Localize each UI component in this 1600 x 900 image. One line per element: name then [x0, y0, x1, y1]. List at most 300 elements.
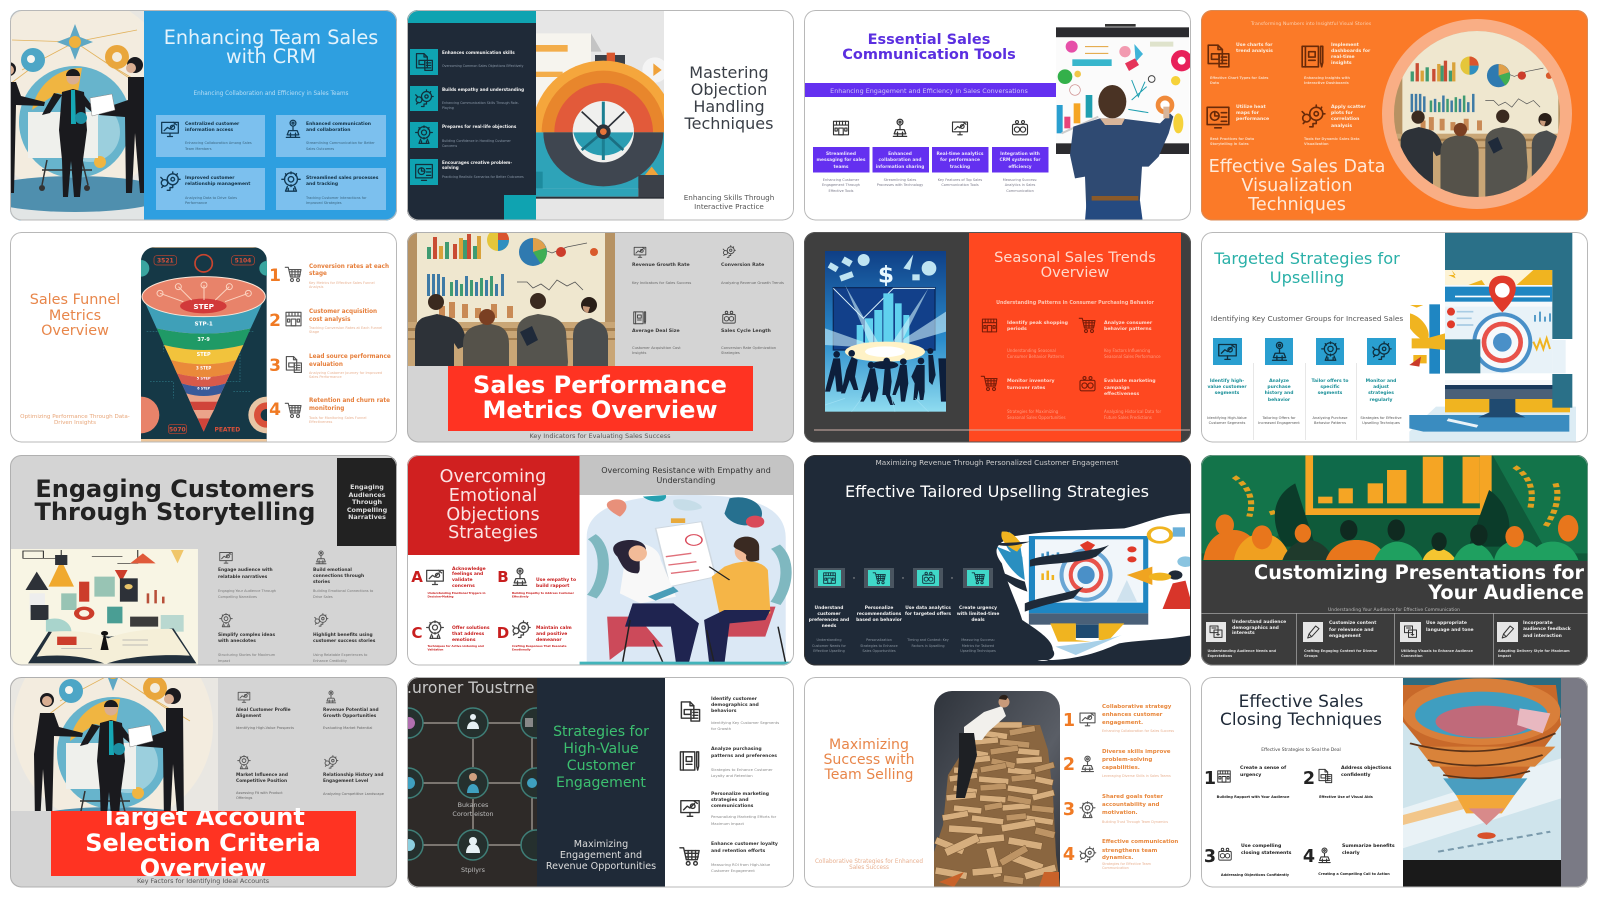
- four strategies: specific: [1320, 384, 1340, 390]
- four columns: Adapting Delivery Style for Maximum: [1498, 649, 1570, 653]
- four points: Diverse skills improve: [1102, 749, 1171, 755]
- four techniques: 3: [1204, 847, 1216, 867]
- four actions: periods: [1007, 326, 1027, 332]
- subtitle: Optimizing Performance Through Data-: [20, 414, 130, 420]
- left dark column: Builds empathy and understanding: [442, 87, 524, 92]
- four metrics: Analysis: [309, 285, 324, 289]
- four strategies: [809, 568, 999, 653]
- left dark column: Encourages creative problem-: [442, 160, 512, 165]
- image: two people in conversation: [577, 495, 801, 668]
- four columns: Crafting Engaging Content for Diverse: [1304, 649, 1378, 653]
- feature cards: Analyzing Data to Drive Sales: [185, 196, 237, 200]
- four actions: [680, 696, 779, 873]
- four actions: Analyzing Historical Data for: [1104, 409, 1161, 414]
- four techniques: Summarize benefits: [1342, 843, 1395, 849]
- four metrics: 2: [269, 311, 281, 331]
- four techniques: Visualization: [1304, 142, 1329, 146]
- four points: Build emotional: [313, 567, 352, 573]
- left dark column: Enhances communication skills: [442, 50, 515, 55]
- image: customer network diagram: Corortleiston: [452, 810, 494, 818]
- panel: Effective Sales Data Visualization Techniques: [1201, 10, 1588, 221]
- subtitle: Driven Insights: [54, 420, 96, 426]
- four strategies: for targeted offers: [905, 611, 951, 617]
- four metrics: [632, 246, 784, 355]
- subtitle: Maximizing: [574, 839, 628, 850]
- title: Effective Sales: [1239, 692, 1364, 712]
- title: Customer: [567, 758, 635, 774]
- four points: enhances customer: [1102, 712, 1163, 718]
- four tactics: Validation: [428, 648, 443, 652]
- four strategies: strategies: [1368, 390, 1394, 396]
- four metrics: Analyzing Customer Journey for Improved: [309, 371, 382, 375]
- four points: stories: [313, 579, 330, 585]
- four columns: engagement: [1329, 633, 1362, 639]
- image: open storybook: [10, 549, 198, 666]
- four tactics: build rapport: [536, 583, 570, 589]
- four tools: tracking: [950, 164, 970, 170]
- four techniques: 2: [1303, 769, 1315, 789]
- four tactics: C: [411, 624, 423, 642]
- four points: Building Emotional Connections to: [313, 589, 373, 593]
- feature cards: Centralized customer: [185, 121, 240, 127]
- four strategies: Identifying High-Value: [1207, 416, 1248, 420]
- four actions: strategies and: [711, 797, 749, 803]
- four points: Compelling Narratives: [218, 595, 257, 599]
- four strategies: Increased Engagement: [1258, 421, 1300, 425]
- four tools: Processes with Technology: [877, 183, 923, 187]
- title: Your Audience: [1427, 581, 1584, 604]
- title: Sales Funnel: [30, 292, 120, 308]
- four tools: Real-time analytics: [936, 151, 984, 157]
- four metrics: Insights: [632, 351, 646, 355]
- subtitle: Maximizing Revenue Through Personalized Customer Engagement: [876, 458, 1119, 467]
- image: customer network diagram: Bukances: [458, 801, 489, 809]
- four metrics: Conversion rates at each: [309, 264, 389, 270]
- four metrics: stage: [309, 271, 327, 277]
- four actions: Strategies to Enhance Customer: [711, 767, 773, 772]
- four tools: Streamlining Sales: [884, 178, 917, 182]
- four techniques: Data: [1210, 81, 1220, 85]
- image: funnel: STP-1: [195, 322, 213, 328]
- four points: [1063, 704, 1178, 870]
- title: Overview: [1041, 264, 1109, 281]
- four strategies: Personalization: [866, 638, 892, 642]
- four points: Engage audience with: [218, 567, 273, 573]
- image: funnel: 5 STEP: [197, 376, 211, 380]
- four techniques: Use charts for: [1236, 42, 1273, 48]
- four metrics: Key Indicators for Sales Success: [632, 281, 691, 285]
- title: Strategies for: [553, 724, 649, 740]
- feature cards: Team Members: [184, 147, 212, 151]
- four techniques: Effective Use of Visual Aids: [1319, 795, 1373, 799]
- four actions: Personalizing Marketing Efforts for: [711, 814, 777, 819]
- four metrics: monitoring: [309, 406, 344, 412]
- image: sales surge celebration: [825, 251, 946, 412]
- title: Targeted Strategies for: [1213, 249, 1400, 268]
- title banner: Selection Criteria: [85, 829, 321, 857]
- subtitle: Key Factors for Identifying Ideal Accounts: [137, 877, 270, 885]
- panel: Sales Performance Metrics Overview: [407, 232, 794, 442]
- four columns: Groups: [1304, 654, 1318, 658]
- four metrics: Sales Cycle Length: [721, 328, 771, 334]
- four tactics: Emotionally: [512, 648, 531, 652]
- image: team presenting CRM globe: [10, 626, 220, 851]
- panel: Seasonal Sales Trends Overview: [804, 232, 1191, 443]
- four metrics: Conversion Rate Optimization: [721, 346, 777, 350]
- image: funnel: 3 STEP: [196, 365, 211, 370]
- four techniques: clearly: [1342, 850, 1360, 856]
- four actions: Personalize marketing: [711, 791, 769, 797]
- four metrics: [269, 264, 391, 424]
- four points: Building Trust Through Team Dynamics: [1102, 820, 1168, 824]
- feature cards: Streamlining Communication for Better: [306, 141, 375, 145]
- four strategies: regularly: [1370, 397, 1393, 403]
- four strategies: Tailor offers to: [1312, 378, 1348, 384]
- side tag: Narratives: [348, 513, 386, 521]
- title: Through Storytelling: [35, 498, 315, 526]
- four actions: Maximum Impact: [711, 821, 745, 826]
- four tactics: feelings and: [452, 571, 483, 577]
- title: Enhancing Team Sales: [164, 26, 378, 49]
- title block: Overcoming: [440, 467, 546, 487]
- four actions: Seasonal Sales Opportunities: [1007, 415, 1066, 420]
- image: funnel: 6 STEP: [197, 387, 211, 391]
- title: Overview: [41, 323, 109, 339]
- four columns: demographics and: [1232, 625, 1279, 631]
- subtitle: Key Indicators for Evaluating Sales Success: [529, 432, 671, 440]
- four tools: Enhanced: [888, 151, 912, 157]
- image: team reviewing charts: [407, 232, 615, 366]
- subtitle: Understanding Your Audience for Effective Communication: [1328, 607, 1460, 613]
- subtitle: Transforming Numbers into Insightful Visual Stories: [1250, 21, 1372, 27]
- four criteria: Assessing Fit with Product: [236, 791, 283, 795]
- four columns: Understanding Audience Needs and: [1208, 649, 1277, 653]
- four strategies: preferences and: [809, 617, 849, 623]
- feature cards: and collaboration: [306, 127, 350, 133]
- four strategies: Understand: [815, 605, 843, 611]
- four strategies: Analyze: [1269, 378, 1289, 384]
- four techniques: closing statements: [1241, 850, 1292, 856]
- feature cards: Performance: [185, 201, 207, 205]
- four metrics: Effectiveness: [309, 420, 332, 424]
- four criteria: Ideal Customer Profile: [236, 707, 291, 713]
- title: Visualization: [1241, 176, 1353, 196]
- four actions: communications: [711, 803, 754, 809]
- four strategies: purchase: [1267, 384, 1291, 390]
- four tools: Measuring Success:: [1003, 178, 1037, 182]
- image: man on wooden block tower: [934, 691, 1060, 888]
- four actions: Strategies for Maximizing: [1007, 409, 1059, 414]
- four actions: Analyze consumer: [1104, 320, 1153, 326]
- four metrics: Stage: [309, 330, 319, 334]
- image: marketing target swoosh: [994, 513, 1194, 661]
- four tactics: Decision-Making: [428, 594, 454, 598]
- four techniques: confidently: [1341, 772, 1371, 778]
- four tactics: B: [497, 568, 509, 586]
- panel: Engaging Customers Through Storytelling: [10, 455, 397, 666]
- four strategies: Analyzing Purchase: [1313, 416, 1348, 420]
- four tools: Effective Tools: [828, 189, 854, 193]
- panel: Strategies for High-Value Customer Engagement: [393, 677, 794, 888]
- four techniques: Effective Chart Types for Sales: [1210, 76, 1268, 80]
- four columns: Impact: [1498, 654, 1512, 658]
- four strategies: based on behavior: [856, 617, 903, 623]
- four strategies: Factors in Upselling: [911, 644, 945, 648]
- four criteria: Revenue Potential and: [323, 707, 379, 713]
- four techniques: plots for: [1331, 110, 1354, 116]
- four strategies: Monitor and: [1366, 378, 1396, 384]
- feature cards: information access: [185, 127, 233, 133]
- four strategies: recommendations: [857, 611, 902, 617]
- side tag: Audiences: [348, 491, 386, 499]
- panel: Essential Sales Communication Tools: [804, 10, 1192, 221]
- four tools: efficiency: [1008, 164, 1032, 170]
- four tactics: and positive: [536, 631, 567, 637]
- title: Techniques: [1247, 195, 1346, 215]
- four actions: patterns and preferences: [711, 753, 777, 759]
- four actions: Loyalty and Retention: [711, 773, 753, 778]
- four actions: and retention efforts: [711, 848, 765, 854]
- four actions: Enhance customer loyalty: [711, 841, 778, 847]
- four criteria: Market Influence and: [236, 772, 288, 778]
- four strategies: segments: [1215, 390, 1240, 396]
- four points: 3: [1063, 800, 1075, 820]
- four strategies: Sales Opportunities: [862, 649, 896, 653]
- four columns: Utilizing Visuals to Enhance Audience: [1401, 649, 1474, 653]
- title: Metrics: [49, 308, 101, 324]
- side tag: Through: [352, 498, 383, 506]
- four techniques: dashboards for: [1331, 48, 1371, 54]
- four metrics: Customer acquisition: [309, 309, 377, 315]
- four points: Highlight benefits using: [313, 632, 373, 638]
- four actions: behaviors: [711, 708, 737, 714]
- image: target on monitor: [1409, 232, 1576, 443]
- four tactics: [411, 566, 576, 652]
- four tools: Enhancing Customer: [823, 178, 860, 182]
- image: funnel: [141, 247, 267, 442]
- four metrics: Strategies: [721, 351, 740, 355]
- panel: Targeted Strategies for Upselling: [1201, 232, 1588, 443]
- four strategies: Customer Needs for: [812, 644, 847, 648]
- four strategies: customer: [817, 611, 841, 617]
- four actions: Key Factors Influencing: [1104, 348, 1151, 353]
- title: Team Selling: [824, 767, 913, 783]
- subtitle: Enhancing Collaboration and Efficiency in Sales Teams: [194, 91, 349, 97]
- four points: Enhancing Collaboration for Sales Success: [1102, 729, 1174, 733]
- feature cards: [156, 115, 386, 210]
- four tactics: Understanding Emotional Triggers in: [428, 591, 485, 595]
- four actions: for Growth: [711, 726, 732, 731]
- four metrics: 3: [269, 356, 281, 376]
- panel: Mastering Objection Handling Techniques: [407, 10, 794, 221]
- title: Effective Sales Data: [1209, 157, 1385, 177]
- feature cards: relationship management: [185, 181, 251, 187]
- four actions: Consumer Behavior Patterns: [1007, 354, 1064, 359]
- four points: Communication: [1102, 866, 1129, 870]
- four actions: [981, 318, 1161, 420]
- image: man at whiteboard: [1056, 24, 1192, 221]
- four points: Using Relatable Experiences to: [313, 653, 367, 657]
- four tactics: Acknowledge: [452, 566, 486, 572]
- four tactics: Offer solutions: [452, 625, 490, 631]
- four tactics: D: [497, 624, 509, 642]
- four tactics: A: [411, 568, 423, 586]
- four columns: [1201, 613, 1588, 666]
- feature cards: Enhancing Collaboration Among Sales: [185, 141, 252, 145]
- four tools: teams: [833, 164, 849, 170]
- image: audience watching chart: [1201, 453, 1589, 562]
- four techniques: Use compelling: [1241, 843, 1281, 849]
- four techniques: performance: [1236, 116, 1269, 122]
- four tools: for performance: [940, 157, 980, 163]
- subtitle: Engagement and: [560, 850, 642, 861]
- four points: connections through: [313, 573, 364, 579]
- four tools: information sharing: [876, 164, 924, 170]
- left dark column: [407, 10, 536, 221]
- subtitle: Effective Strategies to Seal the Deal: [1261, 747, 1341, 753]
- four strategies: Create urgency: [959, 605, 997, 611]
- title: Upselling: [1270, 268, 1344, 287]
- side tag: Compelling: [347, 506, 388, 514]
- left dark column: Building Confidence in Handling Customer: [442, 139, 511, 143]
- four points: Engaging Your Audience Through: [218, 589, 276, 593]
- panel: Sales Funnel Metrics Overview: [10, 232, 397, 445]
- four criteria: Growth Opportunities: [323, 713, 377, 719]
- four criteria: Competitive Position: [236, 778, 287, 784]
- four tools: Engagement Through: [822, 183, 860, 187]
- left dark column: Prepares for real-life objections: [442, 124, 517, 129]
- title: Objection: [691, 80, 767, 99]
- four tactics: demeanor: [536, 637, 562, 643]
- feature cards: and tracking: [306, 181, 338, 187]
- four techniques: Best Practices for Data: [1210, 137, 1255, 141]
- subtitle: Understanding Patterns in Consumer Purchasing Behavior: [996, 300, 1155, 306]
- four points: Shared goals foster: [1102, 794, 1163, 800]
- four actions: Evaluate marketing: [1104, 378, 1156, 384]
- feature cards: Improved customer: [185, 175, 235, 181]
- side tag: Engaging: [350, 483, 384, 491]
- four points: problem-solving: [1102, 757, 1152, 763]
- four techniques: Implement: [1331, 42, 1360, 48]
- image: customer network diagram: [393, 677, 551, 888]
- four points: Drive Sales: [313, 595, 333, 599]
- subtitle band: Enhancing Engagement and Efficiency in Sales Conversations: [830, 87, 1028, 95]
- panel: Overcoming Emotional Objections Strategies: [407, 455, 801, 668]
- four criteria: Evaluating Market Potential: [323, 726, 372, 730]
- four points: Strategies for Effective Team: [1102, 862, 1152, 866]
- four points: relatable narratives: [218, 574, 268, 580]
- title: Engagement: [556, 775, 646, 791]
- four metrics: Customer Acquisition Cost: [632, 346, 681, 350]
- panel: Maximizing Success with Team Selling: [804, 677, 1191, 888]
- four strategies: Use data analytics: [905, 605, 951, 611]
- four points: strengthens team: [1102, 848, 1158, 854]
- four columns: Understand audience: [1232, 619, 1286, 625]
- four strategies: Personalize: [865, 605, 893, 611]
- four criteria: Offerings: [236, 796, 253, 800]
- four columns: and interaction: [1523, 633, 1562, 639]
- four columns: for relevance and: [1329, 627, 1374, 633]
- four metrics: Lead source performance: [309, 354, 391, 360]
- four strategies: segments: [1318, 390, 1343, 396]
- four actions: Analyze purchasing: [711, 746, 762, 752]
- four tools: CRM systems for: [999, 157, 1041, 163]
- four criteria: Engagement Level: [323, 778, 369, 784]
- four columns: Connection: [1401, 654, 1423, 658]
- four tactics: Crafting Responses That Resonate: [512, 644, 567, 648]
- four strategies: needs: [822, 623, 837, 629]
- four actions: Monitor inventory: [1007, 378, 1055, 384]
- four actions: Measuring ROI from High-Value: [711, 862, 771, 867]
- four points: 4: [1063, 845, 1075, 865]
- four points: accountability and: [1102, 802, 1160, 808]
- four tools: Analytics in Sales: [1005, 183, 1035, 187]
- four strategies: Timing and Context: Key: [906, 638, 949, 642]
- title: Effective Tailored Upselling Strategies: [845, 482, 1149, 501]
- four techniques: trend analysis: [1236, 48, 1273, 54]
- image: sales surge celebration: $: [878, 260, 894, 288]
- title: Success with: [823, 752, 915, 768]
- feature cards: Streamlined sales processes: [306, 175, 379, 181]
- four techniques: Apply scatter: [1331, 104, 1366, 110]
- four techniques: [1207, 42, 1371, 146]
- four techniques: 4: [1303, 847, 1315, 867]
- four strategies: value customer: [1207, 384, 1247, 390]
- title: Handling: [693, 97, 765, 116]
- four tactics: concerns: [452, 583, 475, 589]
- four metrics: Conversion Rate: [721, 262, 764, 268]
- four tools: collaboration and: [879, 157, 921, 163]
- four actions: Identify peak shopping: [1007, 320, 1068, 326]
- four points: Enhance Credibility: [313, 659, 347, 663]
- four tools: Key Features of Top Sales: [938, 178, 982, 182]
- four points: Simplify complex ideas: [218, 632, 275, 638]
- four strategies: Strategies for Effective: [1360, 416, 1402, 420]
- title: High-Value: [563, 741, 639, 757]
- title: with CRM: [226, 45, 316, 68]
- four points: with anecdotes: [218, 638, 256, 644]
- four actions: Future Sales Predictions: [1104, 415, 1152, 420]
- four columns: Expectations: [1208, 654, 1232, 658]
- subtitle block: [580, 455, 795, 495]
- four criteria: Identifying High-Value Prospects: [236, 726, 294, 730]
- subtitle block: Understanding: [657, 476, 715, 485]
- four tactics: validate: [452, 577, 473, 583]
- four points: Leveraging Diverse Skills in Sales Teams: [1102, 774, 1171, 778]
- four actions: Customer Engagement: [711, 868, 755, 873]
- four actions: Identifying Key Customer Segments: [711, 720, 779, 725]
- title banner: Overview: [140, 854, 266, 882]
- four techniques: [1204, 765, 1395, 877]
- four strategies: Understanding: [817, 638, 841, 642]
- title block: Emotional: [449, 486, 537, 506]
- four techniques: Create a sense of: [1240, 765, 1287, 771]
- four columns: audience feedback: [1523, 626, 1572, 632]
- four techniques: real-time: [1331, 54, 1355, 60]
- four metrics: Average Deal Size: [632, 328, 680, 334]
- four actions: Understanding Seasonal: [1007, 348, 1056, 353]
- four techniques: Utilize heat: [1236, 104, 1267, 110]
- title: Techniques: [684, 114, 773, 133]
- subtitle: Interactive Practice: [694, 202, 764, 211]
- four criteria: Analyzing Competitive Landscape: [323, 792, 385, 796]
- panel: Enhancing Team Sales with CRM: [0, 0, 397, 221]
- four columns: Customize content: [1329, 620, 1377, 626]
- image: funnel: PEATED: [214, 427, 240, 434]
- four strategies: Effective Upselling: [813, 649, 845, 653]
- panel: Effective Tailored Upselling Strategies: [804, 455, 1194, 666]
- panel: Customizing Presentations for Your Audience: [1201, 453, 1589, 666]
